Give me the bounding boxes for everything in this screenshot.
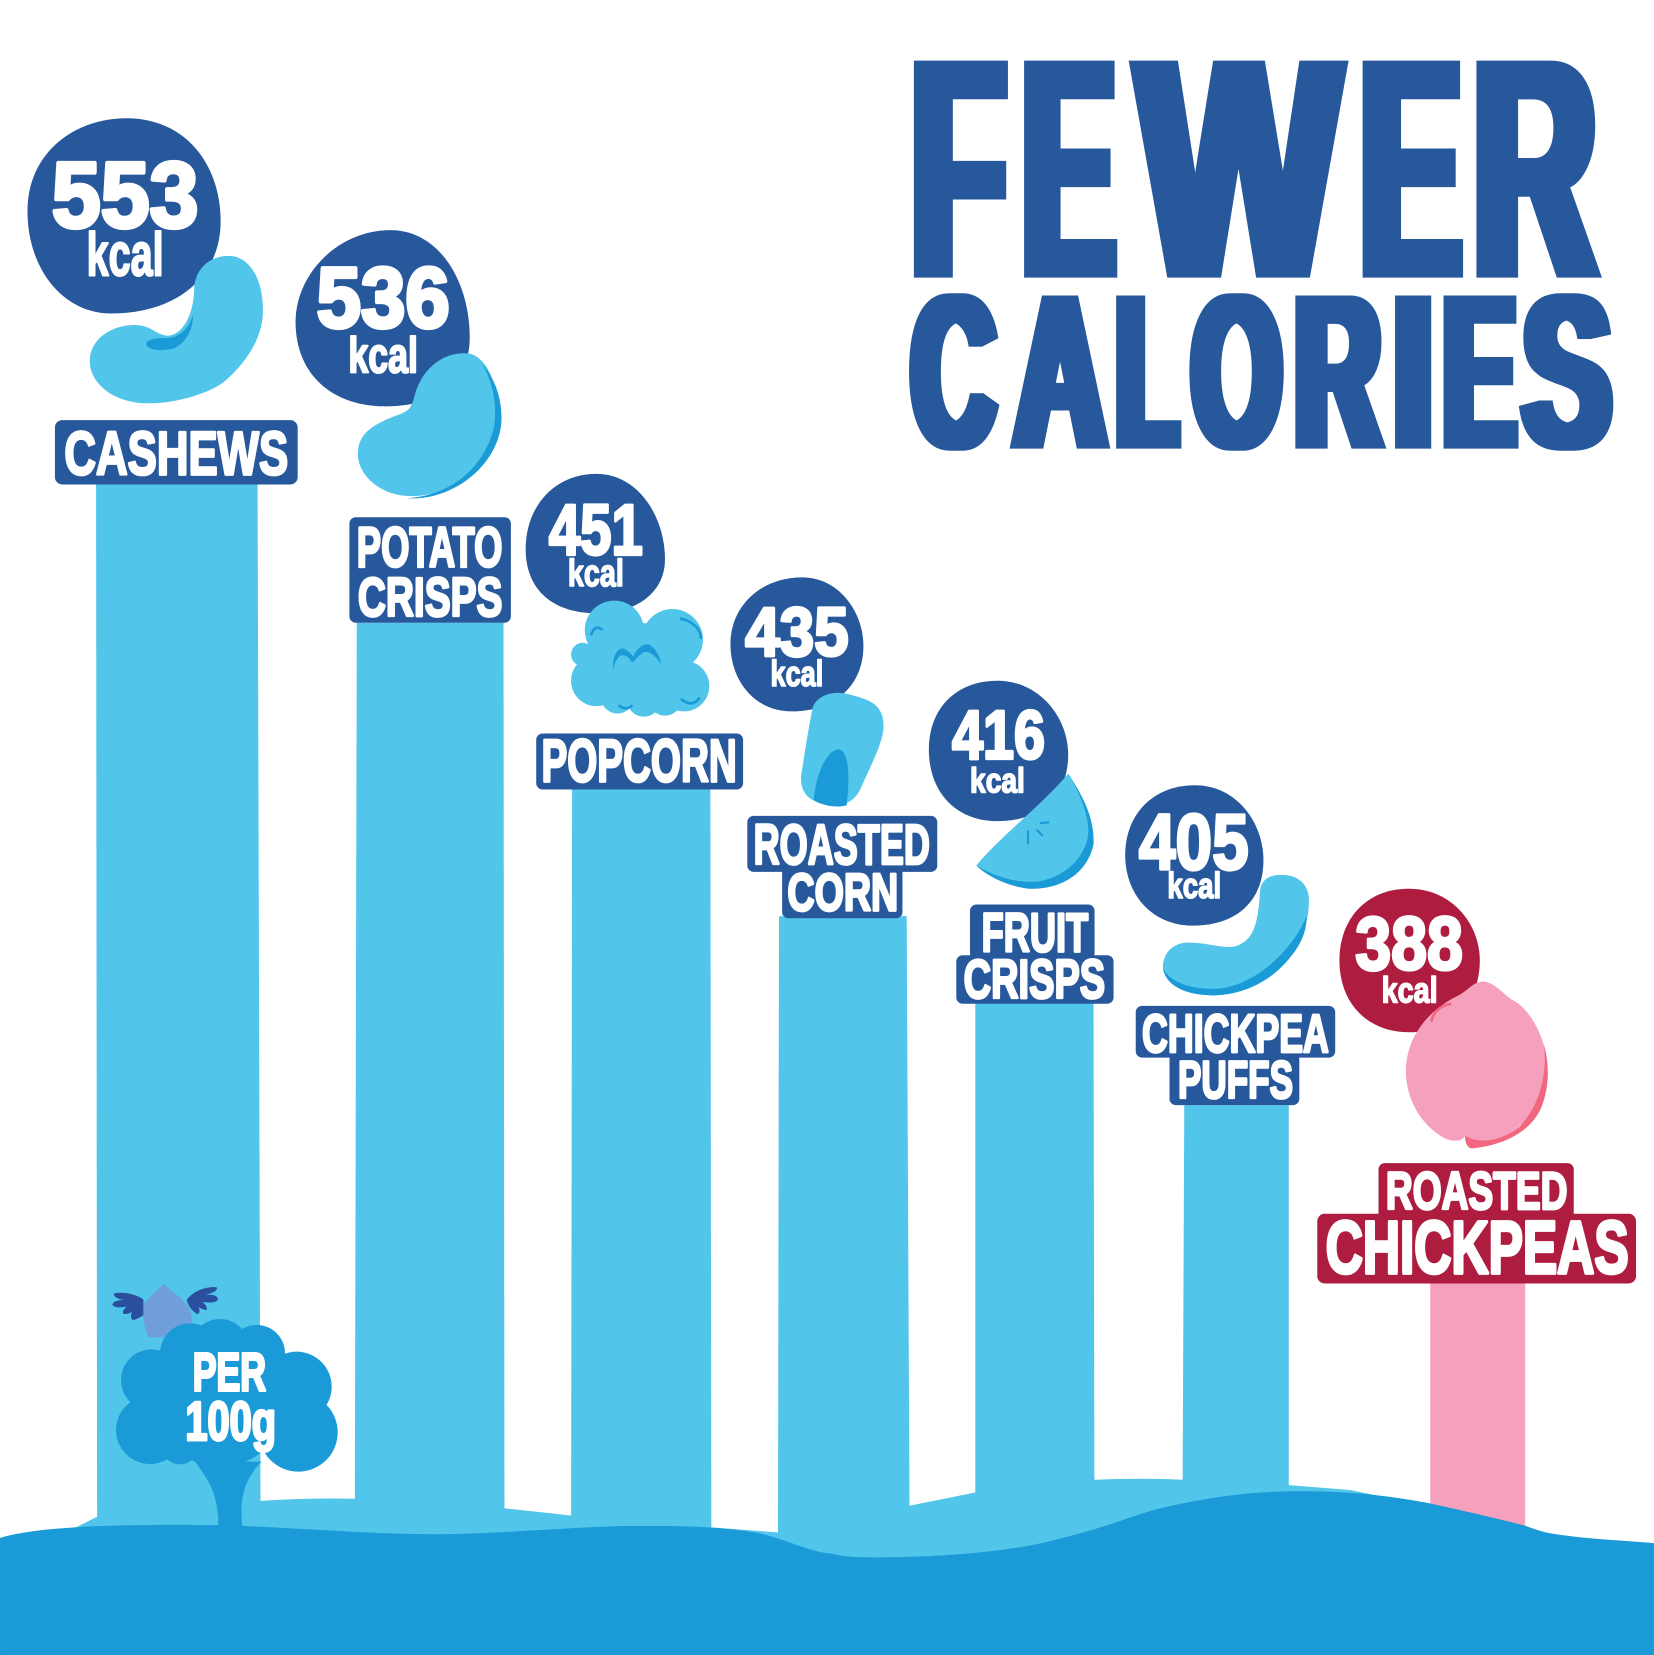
bubble: 405 kcal: kcal xyxy=(1167,866,1221,906)
bubble: 451 kcal: kcal xyxy=(568,553,624,595)
column: potato crisps xyxy=(296,230,511,1583)
ground xyxy=(0,1491,1654,1655)
label: roasted chickpeas xyxy=(1317,1162,1636,1289)
label: fruit crisps: FRUIT xyxy=(982,902,1088,964)
label: fruit crisps: CRISPS xyxy=(964,948,1105,1010)
text: per 100g: 100g xyxy=(185,1390,276,1452)
icon: potato crisp xyxy=(358,353,501,498)
text: per 100g: PER xyxy=(193,1344,266,1403)
light blue hill behind bars xyxy=(65,1479,1388,1583)
label: cashews: CASHEWS xyxy=(64,419,288,487)
bubble: 435 kcal: 435 xyxy=(745,593,849,670)
title: C xyxy=(912,250,995,492)
column: roasted chickpeas xyxy=(1317,889,1636,1583)
title xyxy=(912,0,1611,492)
bar: roasted chickpeas xyxy=(1430,1282,1525,1583)
bar: cashews xyxy=(96,483,261,1583)
bubble: 553 kcal: kcal xyxy=(87,220,164,288)
bubble: 416 kcal: 416 xyxy=(952,696,1045,773)
column: roasted corn xyxy=(730,577,937,1583)
title: E xyxy=(1023,0,1114,341)
bar: roasted corn xyxy=(778,916,910,1583)
bubble: 536 kcal: 536 xyxy=(317,251,450,346)
label: roasted corn: CORN xyxy=(787,863,898,922)
column: cashews xyxy=(27,118,298,1583)
bubble: 405 kcal xyxy=(1125,785,1263,926)
title: A xyxy=(1015,250,1105,492)
label: potato crisps: CRISPS xyxy=(358,566,502,628)
title: F xyxy=(912,0,1005,341)
title: L xyxy=(1117,250,1177,492)
icon: popcorn xyxy=(571,601,709,717)
bubble: 536 kcal: kcal xyxy=(348,328,418,384)
label: chickpea puffs xyxy=(1136,1004,1335,1110)
label: roasted corn: ROASTED xyxy=(754,813,930,877)
bubble: 416 kcal xyxy=(929,681,1068,821)
bubble: 405 kcal: 405 xyxy=(1139,797,1249,886)
label: roasted corn xyxy=(747,813,937,922)
label: potato crisps: POTATO xyxy=(357,515,502,579)
text: per 100g xyxy=(185,1344,276,1452)
bubble: 451 kcal xyxy=(526,474,665,613)
title: W xyxy=(1138,0,1341,341)
bubble: 435 kcal xyxy=(730,577,863,711)
column: fruit crisps xyxy=(929,681,1114,1583)
bubble: 435 kcal: kcal xyxy=(771,654,823,694)
column: chickpea puffs xyxy=(1125,785,1335,1583)
label: chickpea puffs: PUFFS xyxy=(1178,1051,1293,1110)
icon: apple slice xyxy=(976,774,1094,889)
title: E xyxy=(1444,250,1515,492)
icon: winged chickpea xyxy=(112,1283,218,1337)
icon: corn kernel xyxy=(801,693,884,807)
title: E xyxy=(1361,0,1460,341)
bubble: 388 kcal: 388 xyxy=(1355,901,1463,985)
bubble: 388 kcal: kcal xyxy=(1382,971,1438,1011)
title: O xyxy=(1192,250,1281,492)
bar: potato crisps xyxy=(355,623,505,1583)
column: popcorn xyxy=(526,474,743,1583)
bubble: 388 kcal xyxy=(1339,889,1480,1032)
bar: popcorn xyxy=(571,790,711,1583)
icon: chickpea puff xyxy=(1163,875,1309,995)
title: R xyxy=(1295,250,1380,492)
bubble: 416 kcal: kcal xyxy=(970,762,1025,801)
label: roasted chickpeas: ROASTED xyxy=(1386,1162,1567,1221)
label: fruit crisps xyxy=(956,902,1114,1010)
label: popcorn xyxy=(536,728,743,795)
label: chickpea puffs: CHICKPEA xyxy=(1142,1004,1329,1064)
bar: chickpea puffs xyxy=(1182,1105,1289,1583)
bubble: 553 kcal: 553 xyxy=(52,143,198,247)
bubble: 451 kcal: 451 xyxy=(549,491,643,571)
bubble: 536 kcal xyxy=(296,230,470,406)
label: potato crisps xyxy=(349,515,511,628)
icon: chickpea xyxy=(1406,982,1548,1148)
label: popcorn: POPCORN xyxy=(541,728,737,795)
bubble: 553 kcal xyxy=(27,118,221,313)
icon: cashew xyxy=(90,256,263,403)
bar: fruit crisps xyxy=(975,1003,1095,1583)
title: I xyxy=(1393,250,1433,492)
per 100g tree xyxy=(112,1283,338,1527)
tree canopy and trunk xyxy=(116,1319,338,1527)
